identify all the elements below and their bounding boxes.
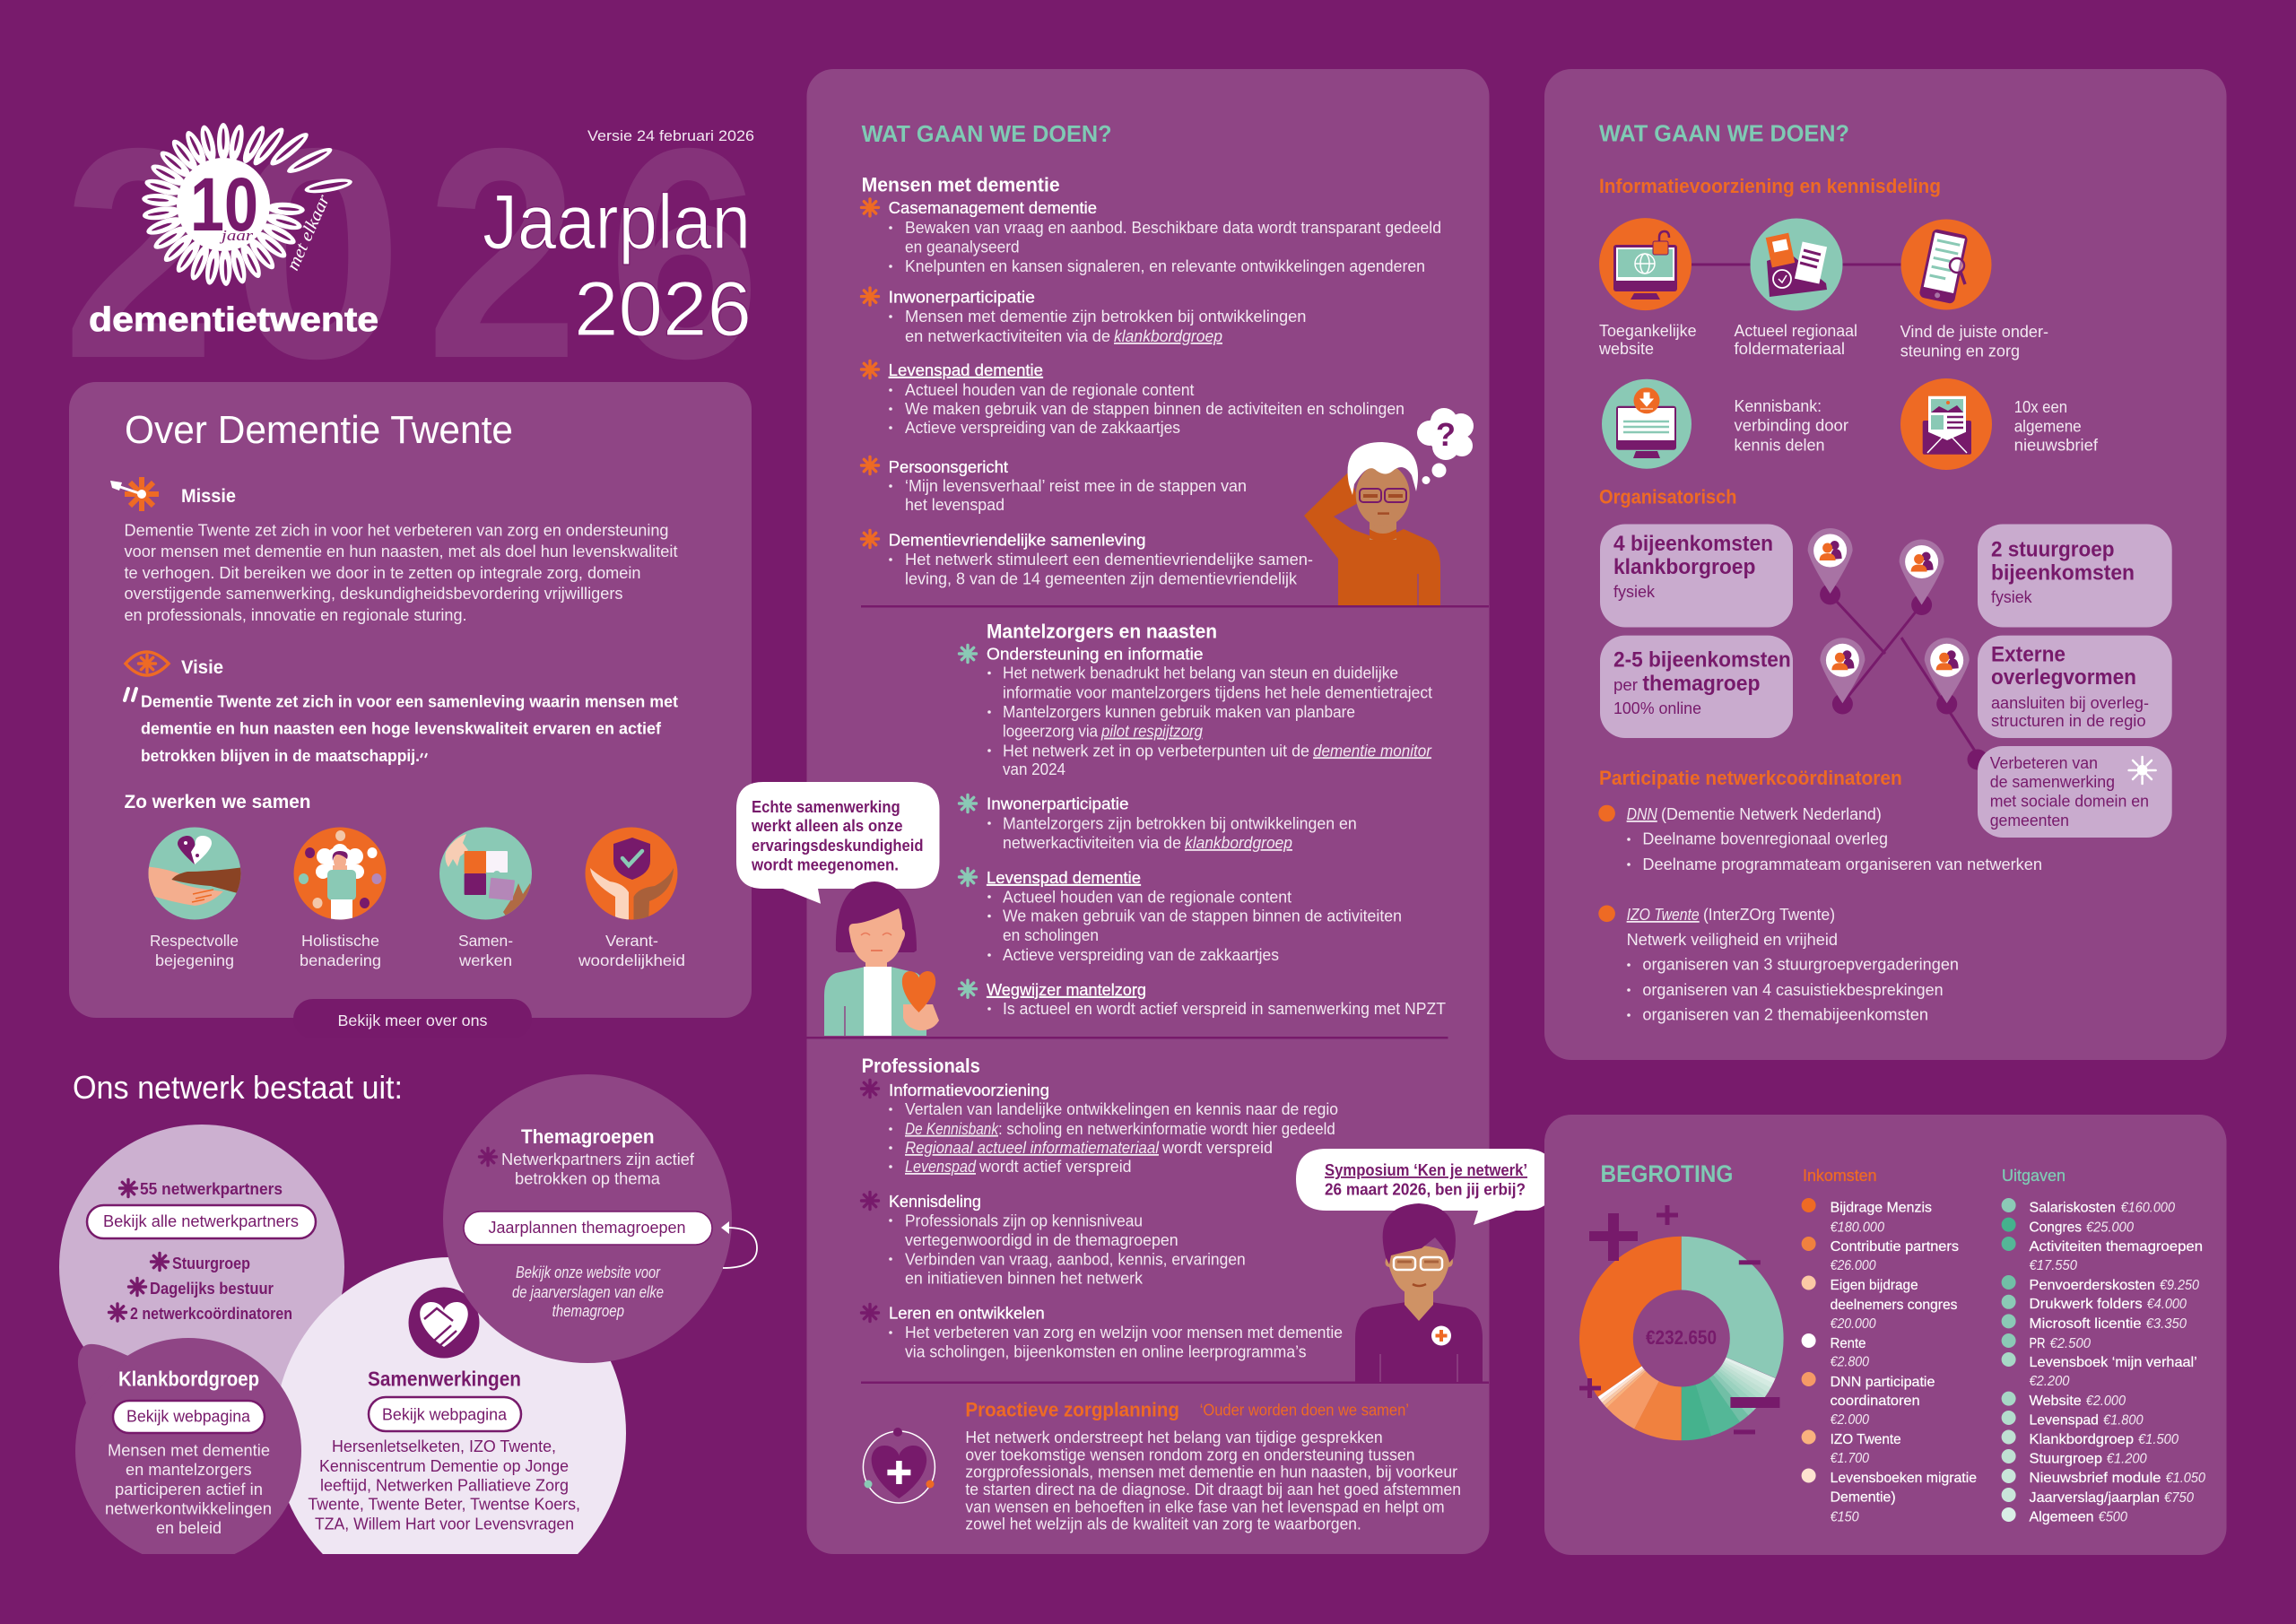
legend: uitgaven: €25.000 bbox=[2086, 1220, 2134, 1236]
section: professionals: : scholing en netwerkinformatie wordt hier gedeeld bbox=[998, 1120, 1335, 1138]
section: mantelzorgers en naasten: logeerzorg via bbox=[1003, 723, 1099, 741]
legend: uitgaven: Microsoft licentie bbox=[2029, 1316, 2142, 1332]
circle: samenwerkingen: leeftijd, Netwerken Palliatieve Zorg bbox=[320, 1477, 569, 1495]
illustration: doctor bbox=[1355, 1203, 1483, 1382]
legend: uitgaven: Stuurgroep bbox=[2029, 1452, 2102, 1467]
list: izo twente: (InterZOrg Twente) bbox=[1703, 906, 1835, 924]
section: mantelzorgers en naasten: Mantelzorgers kunnen gebruik maken van planbare bbox=[1003, 703, 1355, 721]
text: nieuwsbrief: 10x een bbox=[2014, 398, 2067, 416]
arrow: to thema button bbox=[721, 1221, 757, 1268]
circle: netwerkpartners: 55 netwerkpartners bbox=[140, 1180, 283, 1198]
circle: samenwerkingen: Kenniscentrum Dementie op Jonge bbox=[319, 1457, 569, 1475]
circle: netwerkpartners: Bekijk alle netwerkpartners bbox=[103, 1212, 299, 1230]
text: kennisbank: kennis delen bbox=[1735, 437, 1824, 455]
legend: uitgaven: Jaarverslag/jaarplan bbox=[2029, 1490, 2160, 1506]
legend: inkomsten: €150 bbox=[1831, 1510, 1859, 1524]
section: mensen met dementie: en geanalyseerd bbox=[905, 239, 1020, 256]
card: stuurgroep: fysiek bbox=[1991, 588, 2033, 606]
section: mantelzorgers en naasten: klankbordgroep bbox=[1185, 834, 1292, 852]
section: mantelzorgers en naasten: dementie monitor bbox=[1313, 742, 1432, 760]
section: mensen met dementie: Dementievriendelijke samenleving bbox=[889, 532, 1146, 550]
icon: nieuwsbrief bbox=[1900, 378, 1992, 470]
section: mensen met dementie: Actueel houden van de regionale content bbox=[905, 381, 1195, 399]
circle: klankbordgroep: netwerkontwikkelingen bbox=[105, 1500, 272, 1518]
legend: uitgaven: €2.000 bbox=[2086, 1394, 2126, 1409]
section: professionals: wordt verspreid bbox=[1161, 1139, 1273, 1157]
watermark 2026: 0 bbox=[231, 86, 404, 421]
card: themagroep: per bbox=[1613, 676, 1638, 694]
list: dnn: Deelname programmateam organiseren van netwerken bbox=[1642, 855, 2042, 873]
divider bbox=[807, 1037, 1448, 1038]
visie quote: Dementie Twente zet zich in voor een samenleving waarin mensen met bbox=[141, 692, 678, 710]
section: professionals: Professionals bbox=[862, 1055, 980, 1077]
visie heading: Visie bbox=[181, 657, 223, 678]
text: kennisbank: Kennisbank: bbox=[1735, 397, 1822, 415]
section: professionals: Levenspad bbox=[905, 1158, 977, 1176]
card: stuurgroep: 2 stuurgroep bbox=[1991, 537, 2115, 561]
icon: foldermateriaal bbox=[1751, 219, 1842, 310]
watermark 2026 bbox=[63, 86, 761, 421]
legend: uitgaven: €2.500 bbox=[2050, 1336, 2091, 1351]
circle: klankbordgroep bbox=[75, 1338, 301, 1564]
icon: kennisbank bbox=[1602, 379, 1692, 469]
icon: heart handshake bbox=[409, 1288, 479, 1358]
callout: symposium: 26 maart 2026, ben jij erbij? bbox=[1325, 1180, 1526, 1198]
thought cloud: ? bbox=[1436, 416, 1456, 453]
legend: uitgaven: Website bbox=[2029, 1394, 2082, 1409]
circle: netwerkpartners: Dagelijks bestuur bbox=[150, 1280, 274, 1298]
legend: inkomsten: €26.000 bbox=[1831, 1258, 1876, 1273]
section: mantelzorgers en naasten: Inwonerparticipatie bbox=[987, 795, 1128, 813]
circle: themagroepen bbox=[443, 1074, 732, 1363]
legend: uitgaven: Uitgaven bbox=[2002, 1167, 2066, 1185]
panel: wat gaan we doen, doelgroepen bbox=[807, 69, 1489, 1554]
section: mensen met dementie: en netwerkactiviteiten via de bbox=[905, 327, 1110, 345]
legend: inkomsten: IZO Twente bbox=[1831, 1432, 1901, 1447]
heading: participatie: Participatie netwerkcoördinatoren bbox=[1599, 767, 1902, 789]
callout: echte samenwerking: ervaringsdeskundigheid bbox=[752, 837, 924, 855]
logo met elkaar: met elkaar bbox=[283, 192, 334, 274]
section: proactieve zorgplanning: ‘Ouder worden doen we samen’ bbox=[1200, 1402, 1409, 1420]
icon labels: Verant- bbox=[605, 932, 658, 950]
network heading: Ons netwerk bestaat uit: bbox=[73, 1069, 403, 1106]
illustration: woman with heart bbox=[824, 881, 939, 1036]
circle: klankbordgroep: Klankbordgroep bbox=[118, 1368, 259, 1391]
legend: uitgaven: €1.800 bbox=[2103, 1413, 2144, 1429]
legend: uitgaven bbox=[2002, 1167, 2205, 1524]
icon labels row 1 bbox=[1598, 322, 2048, 360]
section: mensen met dementie: Het netwerk stimuleert een dementievriendelijke samen- bbox=[905, 551, 1313, 569]
text: nieuwsbrief bbox=[2014, 398, 2099, 455]
legend: uitgaven: Levenspad bbox=[2029, 1413, 2099, 1429]
list: dnn: (Dementie Netwerk Nederland) bbox=[1661, 805, 1882, 823]
section: mensen met dementie: Mensen met dementie bbox=[862, 174, 1060, 195]
missie text bbox=[124, 522, 678, 624]
legend: inkomsten: Eigen bijdrage bbox=[1831, 1278, 1918, 1293]
section: mantelzorgers en naasten: Mantelzorgers en naasten bbox=[987, 621, 1217, 643]
button: bekijk meer over ons bbox=[293, 999, 532, 1038]
callout: symposium: Symposium ‘Ken je netwerk’ bbox=[1325, 1161, 1527, 1179]
title: 2026 bbox=[574, 266, 752, 352]
section: mantelzorgers en naasten: Is actueel en wordt actief verspreid in samenwerking met NPZT bbox=[1003, 1000, 1446, 1018]
section: professionals: Professionals zijn op kennisniveau bbox=[905, 1211, 1143, 1229]
text: kennisbank bbox=[1735, 397, 1848, 455]
section: professionals: wordt actief verspreid bbox=[978, 1158, 1132, 1176]
legend: inkomsten: Contributie partners bbox=[1831, 1239, 1959, 1255]
section: proactieve zorgplanning: Proactieve zorgplanning bbox=[965, 1398, 1179, 1420]
icon labels: benadering bbox=[300, 951, 381, 969]
section: mantelzorgers en naasten: Wegwijzer mantelzorg bbox=[987, 981, 1146, 999]
diagram: connecting lines and pins bbox=[1808, 528, 1987, 769]
missie text: te verhogen. Dit bereiken we door in te zetten op integrale zorg, domein bbox=[124, 564, 640, 582]
list: izo twente bbox=[1598, 906, 1959, 1024]
heading: WAT GAAN WE DOEN? bbox=[862, 120, 1112, 147]
legend: uitgaven: €750 bbox=[2164, 1490, 2194, 1506]
legend: inkomsten: Dementie) bbox=[1831, 1490, 1896, 1506]
legend: uitgaven: Levensboek ‘mijn verhaal’ bbox=[2029, 1355, 2197, 1370]
text: nieuwsbrief: nieuwsbrief bbox=[2014, 437, 2099, 455]
watermark 2026: 2 bbox=[426, 86, 578, 421]
section: mensen met dementie: leving, 8 van de 14 gemeenten zijn dementievriendelijk bbox=[905, 569, 1298, 587]
section: mantelzorgers en naasten: Levenspad dementie bbox=[987, 869, 1141, 887]
circle: samenwerkingen: TZA, Willem Hart voor Levensvragen bbox=[315, 1515, 574, 1533]
circle: netwerkpartners: Stuurgroep bbox=[172, 1255, 250, 1272]
legend: uitgaven: €160.000 bbox=[2121, 1201, 2175, 1216]
legend: uitgaven: Algemeen bbox=[2029, 1510, 2093, 1524]
icon: vind ondersteuning bbox=[1901, 219, 1991, 310]
legend: uitgaven: €17.550 bbox=[2029, 1258, 2077, 1273]
missie heading: Missie bbox=[181, 486, 236, 507]
heading: informatievoorziening: Informatievoorziening en kennisdeling bbox=[1599, 175, 1941, 197]
callout: echte samenwerking: werkt alleen als onze bbox=[751, 817, 902, 835]
legend: uitgaven: €1.050 bbox=[2166, 1471, 2205, 1486]
section: professionals bbox=[861, 1055, 1343, 1361]
button: bekijk meer over ons: Bekijk meer over ons bbox=[337, 1012, 488, 1029]
icon labels: bejegening bbox=[155, 951, 234, 969]
circle: themagroepen: betrokken op thema bbox=[515, 1169, 661, 1187]
list: izo twente: Netwerk veiligheid en vrijheid bbox=[1627, 931, 1838, 949]
legend: inkomsten: €1.700 bbox=[1831, 1451, 1869, 1466]
icon: verantwoordelijkheid bbox=[585, 827, 678, 925]
section: professionals: Vertalen van landelijke ontwikkelingen en kennis naar de regio bbox=[905, 1100, 1338, 1118]
divider bbox=[861, 1381, 1489, 1384]
icon labels: woordelijkheid bbox=[578, 951, 685, 969]
card: externe overlegvormen: structuren in de regio bbox=[1991, 712, 2146, 730]
section: mensen met dementie bbox=[861, 174, 1441, 587]
section: professionals: Kennisdeling bbox=[889, 1193, 981, 1211]
legend: inkomsten: Bijdrage Menzis bbox=[1831, 1201, 1932, 1216]
missie text: voor mensen met dementie en hun naasten, met als doel hun levenskwaliteit bbox=[124, 543, 678, 560]
list: dnn bbox=[1598, 805, 2042, 873]
card: themagroep: 2-5 bijeenkomsten bbox=[1613, 648, 1791, 673]
section: mantelzorgers en naasten: pilot respijtzorg bbox=[1100, 723, 1203, 741]
section: professionals: vertegenwoordigd in de themagroepen bbox=[905, 1231, 1178, 1249]
circle: klankbordgroep: Mensen met dementie bbox=[108, 1442, 270, 1460]
icon labels row 1: Actueel regionaal bbox=[1735, 322, 1857, 340]
icon: toegankelijke website bbox=[1599, 218, 1692, 310]
icon: holistische benadering bbox=[294, 827, 386, 923]
section: professionals: Informatievoorziening bbox=[889, 1081, 1049, 1099]
circle: netwerkpartners: 2 netwerkcoördinatoren bbox=[130, 1305, 292, 1323]
list: dnn: Deelname bovenregionaal overleg bbox=[1642, 830, 1888, 848]
card: themagroep: 100% online bbox=[1613, 699, 1701, 717]
section: mensen met dementie: Persoonsgericht bbox=[889, 458, 1008, 476]
legend: uitgaven: Drukwerk folders bbox=[2029, 1297, 2143, 1312]
card: verbeteren samenwerking: de samenwerking bbox=[1990, 773, 2115, 791]
connector line bbox=[1686, 264, 1906, 265]
section: mantelzorgers en naasten: en scholingen bbox=[1003, 926, 1099, 944]
icon labels row 1: Toegankelijke bbox=[1599, 322, 1697, 340]
circle: themagroepen: themagroep bbox=[552, 1302, 624, 1320]
legend: inkomsten: Rente bbox=[1831, 1336, 1866, 1351]
icon labels: Respectvolle bbox=[150, 932, 239, 950]
visie quote bbox=[125, 689, 678, 765]
visie quote: dementie en hun naasten een hoge levenskwaliteit ervaren en actief bbox=[141, 720, 662, 738]
circle: klankbordgroep: participeren actief in bbox=[115, 1481, 263, 1498]
heading: WAT GAAN WE DOEN? bbox=[1599, 119, 1849, 146]
legend: uitgaven: €1.500 bbox=[2138, 1432, 2179, 1447]
section: mensen met dementie: Levenspad dementie bbox=[889, 361, 1043, 379]
card: themagroep bbox=[1600, 636, 1793, 738]
missie text: Dementie Twente zet zich in voor het verbeteren van zorg en ondersteuning bbox=[124, 522, 669, 540]
section: mantelzorgers en naasten: Het netwerk benadrukt het belang van steun en duidelijke bbox=[1003, 664, 1398, 682]
section: mensen met dementie: Bewaken van vraag en aanbod. Beschikbare data wordt transparant gedeeld bbox=[905, 219, 1441, 237]
section: proactieve zorgplanning bbox=[965, 1398, 1461, 1533]
card: stuurgroep bbox=[1978, 524, 2172, 628]
logo wordmark: dementietwente bbox=[89, 301, 378, 339]
legend: uitgaven: €2.200 bbox=[2029, 1374, 2069, 1389]
version note: Versie 24 februari 2026 bbox=[587, 127, 754, 144]
legend: inkomsten: coordinatoren bbox=[1831, 1394, 1920, 1409]
list: izo twente: IZO Twente bbox=[1627, 906, 1700, 924]
section: professionals: De Kennisbank bbox=[905, 1120, 999, 1138]
section: mantelzorgers en naasten: van 2024 bbox=[1003, 760, 1065, 778]
icon labels bbox=[150, 932, 685, 969]
list: dnn: DNN bbox=[1627, 805, 1658, 823]
callout: echte samenwerking bbox=[736, 782, 940, 904]
section: professionals: en initiatieven binnen het netwerk bbox=[905, 1270, 1144, 1288]
section: professionals: Verbinden van vraag, aanbod, kennis, ervaringen bbox=[905, 1251, 1246, 1269]
missie text: en professionals, innovatie en regionale sturing. bbox=[124, 606, 466, 624]
circle: samenwerkingen: Twente, Twente Beter, Twentse Koers, bbox=[308, 1496, 580, 1514]
watermark 2026: 2 bbox=[63, 86, 215, 421]
plus and minus signs bbox=[1579, 1205, 1779, 1434]
section: mensen met dementie: ‘Mijn levensverhaal’ reist mee in de stappen van bbox=[905, 477, 1247, 495]
card: klankbordgroep bbox=[1600, 524, 1793, 628]
section: professionals: Het verbeteren van zorg en welzijn voor mensen met dementie bbox=[905, 1324, 1343, 1342]
section: professionals: Regionaal actueel informatiemateriaal bbox=[905, 1139, 1160, 1157]
section: mensen met dementie: We maken gebruik van de stappen binnen de activiteiten en scholingen bbox=[905, 400, 1405, 418]
section: proactieve zorgplanning: zowel het welzijn als de kwaliteit van zorg te waarborgen. bbox=[965, 1515, 1361, 1533]
panel: wat gaan we doen, organisatie bbox=[1544, 69, 2226, 1060]
section: proactieve zorgplanning: te starten direct na de diagnose. Dit draagt bij aan het goed afstemmen bbox=[965, 1481, 1461, 1498]
section: mantelzorgers en naasten bbox=[960, 621, 1446, 1018]
legend: uitgaven: Klankbordgroep bbox=[2029, 1432, 2134, 1447]
legend: uitgaven: Nieuwsbrief module bbox=[2029, 1471, 2161, 1486]
circle: klankbordgroep: en mantelzorgers bbox=[126, 1461, 252, 1479]
section: mensen met dementie: Casemanagement dementie bbox=[889, 199, 1097, 217]
divider bbox=[861, 605, 1489, 608]
legend: uitgaven: €9.250 bbox=[2160, 1278, 2199, 1293]
logo sunburst bbox=[142, 123, 353, 286]
zo werken we samen heading: Zo werken we samen bbox=[124, 792, 310, 812]
legend: uitgaven: Salariskosten bbox=[2029, 1201, 2116, 1216]
icon: visie eye bbox=[126, 652, 169, 675]
legend: uitgaven: €3.350 bbox=[2146, 1316, 2187, 1332]
callout: symposium bbox=[1296, 1149, 1555, 1225]
panel: begroting bbox=[1544, 1115, 2226, 1555]
legend: uitgaven: €1.200 bbox=[2107, 1452, 2147, 1467]
section: proactieve zorgplanning: over toekomstige wensen rondom zorg en ondersteuning tussen bbox=[965, 1446, 1415, 1463]
legend: inkomsten: €20.000 bbox=[1831, 1316, 1876, 1332]
illustration: thinking man bbox=[1304, 408, 1474, 605]
text: kennisbank: verbinding door bbox=[1735, 417, 1848, 435]
section: professionals: via scholingen, bijeenkomsten en online leerprogramma’s bbox=[905, 1343, 1306, 1361]
legend: inkomsten: Levensboeken migratie bbox=[1831, 1471, 1977, 1486]
card: externe overlegvormen: overlegvormen bbox=[1991, 665, 2136, 690]
icon labels: werken bbox=[458, 951, 512, 969]
section: mantelzorgers en naasten: Mantelzorgers zijn betrokken bij ontwikkelingen en bbox=[1003, 814, 1357, 832]
logo: 10 jaar dementie twente bbox=[89, 123, 378, 339]
section: mensen met dementie: het levenspad bbox=[905, 496, 1004, 514]
legend: uitgaven: Congres bbox=[2029, 1220, 2082, 1236]
card: stuurgroep: bijeenkomsten bbox=[1991, 561, 2135, 585]
section: professionals: Leren en ontwikkelen bbox=[889, 1305, 1045, 1323]
section: mantelzorgers en naasten: Het netwerk zet in op verbeterpunten uit de bbox=[1003, 742, 1309, 760]
list: izo twente: organiseren van 2 themabijeenkomsten bbox=[1642, 1006, 1928, 1024]
icon labels row 1: website bbox=[1598, 340, 1654, 358]
circle: klankbordgroep: en beleid bbox=[156, 1519, 222, 1537]
circle: themagroepen: de jaarverslagen van elke bbox=[512, 1283, 664, 1301]
card: klankbordgroep: 4 bijeenkomsten bbox=[1613, 532, 1773, 556]
circle: samenwerkingen: Hersenletselketen, IZO Twente, bbox=[332, 1437, 556, 1455]
card: verbeteren samenwerking: Verbeteren van bbox=[1990, 754, 2098, 772]
visie quote: betrokken blijven in de maatschappij. bbox=[141, 747, 420, 765]
section: mantelzorgers en naasten: Actueel houden van de regionale content bbox=[1003, 889, 1292, 907]
logo jaar: jaar bbox=[220, 227, 253, 244]
section: mensen met dementie: klankbordgroep bbox=[1114, 327, 1222, 345]
legend: inkomsten: €180.000 bbox=[1831, 1220, 1884, 1236]
icon labels: Holistische bbox=[301, 932, 379, 950]
section: mensen met dementie: Inwonerparticipatie bbox=[889, 289, 1035, 307]
callout: echte samenwerking: wordt meegenomen. bbox=[751, 856, 899, 874]
circle: klankbordgroep: Bekijk webpagina bbox=[126, 1408, 251, 1426]
legend: inkomsten: Inkomsten bbox=[1803, 1167, 1877, 1185]
section: mantelzorgers en naasten: informatie voor mantelzorgers tijdens het hele dementietraject bbox=[1003, 683, 1432, 701]
circle: themagroepen: Jaarplannen themagroepen bbox=[488, 1219, 685, 1237]
watermark 2026: 6 bbox=[608, 86, 761, 421]
icon labels row 1: Vind de juiste onder- bbox=[1900, 323, 2048, 341]
icon labels: Samen- bbox=[458, 932, 513, 950]
heading: organisatorisch: Organisatorisch bbox=[1599, 486, 1736, 508]
icon: missie dart bbox=[110, 477, 159, 511]
legend: uitgaven: €500 bbox=[2099, 1510, 2127, 1524]
circle: netwerkpartners bbox=[59, 1125, 344, 1410]
section: mantelzorgers en naasten: Actieve verspreiding van de zakkaartjes bbox=[1003, 946, 1279, 964]
icon: sparkle bbox=[2129, 757, 2156, 784]
section: mantelzorgers en naasten: We maken gebruik van de stappen binnen de activiteiten bbox=[1003, 908, 1402, 925]
section: proactieve zorgplanning: Het netwerk onderstreept het belang van tijdige gesprekken bbox=[965, 1429, 1383, 1446]
section: proactieve zorgplanning: van wensen en behoeften in elke fase van het levenspad en helpt om bbox=[965, 1498, 1445, 1515]
heading: BEGROTING bbox=[1600, 1160, 1733, 1187]
panel: over dementie twente bbox=[69, 382, 752, 1018]
circle: samenwerkingen: Bekijk webpagina bbox=[382, 1406, 508, 1424]
chart total: €232.650 bbox=[1646, 1326, 1717, 1349]
logo number 10: 10 bbox=[190, 162, 258, 247]
list: izo twente: organiseren van 3 stuurgroepvergaderingen bbox=[1642, 956, 1959, 974]
thought cloud bbox=[1417, 408, 1474, 484]
circle: samenwerkingen: Samenwerkingen bbox=[368, 1368, 521, 1391]
section: mensen met dementie: Actieve verspreiding van de zakkaartjes bbox=[905, 419, 1180, 437]
section: mantelzorgers en naasten: netwerkactiviteiten via de bbox=[1003, 834, 1181, 852]
title bbox=[483, 179, 752, 352]
legend: uitgaven: Penvoerderskosten bbox=[2029, 1278, 2155, 1293]
legend: inkomsten: deelnemers congres bbox=[1831, 1298, 1957, 1313]
icon: proactieve zorgplanning bbox=[863, 1428, 935, 1503]
icon labels row 1: steuning en zorg bbox=[1900, 343, 2020, 360]
card: externe overlegvormen bbox=[1978, 636, 2172, 738]
icon: respectvolle bejegening bbox=[144, 827, 244, 920]
callout: echte samenwerking: Echte samenwerking bbox=[752, 798, 900, 816]
card: externe overlegvormen: Externe bbox=[1991, 642, 2066, 667]
list: izo twente: organiseren van 4 casuistiekbesprekingen bbox=[1642, 981, 1944, 999]
icon: samenwerken bbox=[439, 827, 532, 920]
circle: themagroepen: Netwerkpartners zijn actief bbox=[501, 1151, 695, 1168]
legend: inkomsten bbox=[1802, 1167, 1977, 1524]
card: verbeteren samenwerking bbox=[1978, 746, 2172, 838]
heading: Over Dementie Twente bbox=[125, 408, 513, 452]
text: nieuwsbrief: algemene bbox=[2014, 418, 2082, 436]
card: verbeteren samenwerking: met sociale domein en bbox=[1990, 793, 2149, 811]
network diagram bbox=[59, 1074, 757, 1609]
missie text: overstijgende samenwerking, deskundigheidsbevordering vrijwilligers bbox=[124, 585, 622, 603]
legend: inkomsten: €2.800 bbox=[1831, 1354, 1869, 1369]
donut chart bbox=[1575, 1205, 1787, 1445]
legend: uitgaven: Activiteiten themagroepen bbox=[2029, 1239, 2203, 1255]
title: Jaarplan bbox=[483, 179, 751, 265]
legend: inkomsten: €2.000 bbox=[1831, 1412, 1869, 1428]
legend: inkomsten: DNN participatie bbox=[1831, 1375, 1935, 1390]
card: klankbordgroep: klankborgroep bbox=[1613, 555, 1755, 579]
card: themagroep: themagroep bbox=[1642, 672, 1760, 696]
circle: samenwerkingen bbox=[281, 1257, 626, 1554]
card: klankbordgroep: fysiek bbox=[1613, 583, 1656, 601]
card: verbeteren samenwerking: gemeenten bbox=[1990, 812, 2069, 829]
legend: uitgaven: €4.000 bbox=[2147, 1297, 2187, 1312]
circle: themagroepen: Themagroepen bbox=[521, 1125, 655, 1148]
card: externe overlegvormen: aansluiten bij overleg- bbox=[1991, 694, 2149, 712]
section: mantelzorgers en naasten: Ondersteuning en informatie bbox=[987, 645, 1204, 663]
section: proactieve zorgplanning: zorgprofessionals, mensen met dementie en hun naasten, bij voorkeur bbox=[965, 1463, 1457, 1481]
section: mensen met dementie: Knelpunten en kansen signaleren, en relevante ontwikkelingen agenderen bbox=[905, 257, 1425, 275]
legend: uitgaven: PR bbox=[2029, 1336, 2045, 1351]
circle: themagroepen: Bekijk onze website voor bbox=[516, 1264, 661, 1281]
icon labels row 1: foldermateriaal bbox=[1735, 340, 1845, 358]
section: mensen met dementie: Mensen met dementie zijn betrokken bij ontwikkelingen bbox=[905, 308, 1306, 326]
